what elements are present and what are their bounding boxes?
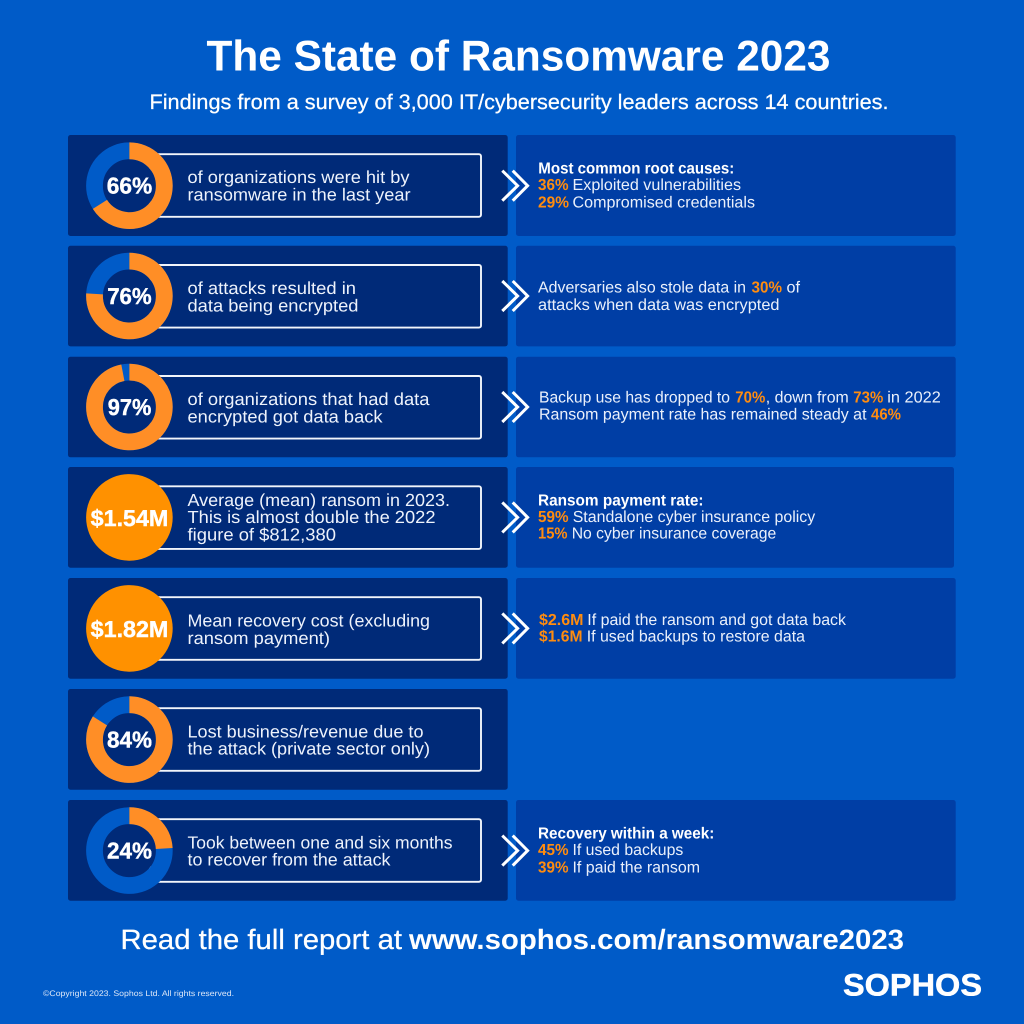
stat circle: $1.82M — [86, 585, 173, 672]
call to action: www.sophos.com/ransomware2023 — [408, 924, 904, 955]
donut: 97% — [94, 372, 164, 442]
backup use text: 70% — [735, 390, 765, 407]
copyright: ©Copyright 2023. Sophos Ltd. All rights reserved. — [43, 989, 234, 998]
text box — [150, 708, 481, 771]
call to action: Read the full report at — [120, 924, 402, 955]
title: The State of Ransomware 2023 — [206, 32, 830, 80]
text box — [150, 154, 481, 217]
chevron arrow — [502, 392, 528, 422]
backup use text: Backup use has dropped to — [539, 390, 730, 407]
right panel — [516, 357, 956, 457]
recovery cost comparison text: $1.6M — [539, 629, 582, 646]
row 3: data back — [68, 357, 956, 457]
stat circle: $1.82M: $1.82M — [91, 616, 168, 642]
text box: Mean recovery cost (excluding — [188, 611, 430, 631]
backup use text: Ransom payment rate has remained steady at — [539, 406, 867, 423]
backup use text: in 2022 — [887, 390, 941, 407]
donut: 66% — [94, 151, 164, 221]
root causes text: 29% — [538, 194, 569, 211]
recovery within a week text: If paid the ransom — [572, 859, 700, 876]
stolen data text: Adversaries also stole data in — [538, 280, 746, 297]
text box: encrypted got data back — [188, 406, 383, 426]
text box: Average (mean) ransom in 2023. — [188, 490, 450, 510]
chevron arrow — [502, 281, 528, 311]
text box: ransom payment) — [188, 628, 330, 648]
row 7: time to recover — [68, 800, 956, 901]
recovery within a week text — [538, 825, 714, 876]
text box: ransomware in the last year — [188, 184, 411, 204]
text box: to recover from the attack — [188, 850, 391, 870]
backup use text: 46% — [871, 406, 901, 423]
recovery cost comparison text: $2.6M — [539, 612, 584, 629]
text box — [150, 486, 481, 549]
chevron arrow — [502, 836, 528, 866]
left panel — [68, 467, 508, 568]
donut: 97%: 97% — [108, 394, 151, 420]
payment rate text: 59% — [538, 509, 568, 526]
donut: 66%: 66% — [107, 172, 152, 198]
row 5: recovery cost — [68, 578, 956, 679]
root causes text — [538, 160, 755, 211]
text box — [150, 819, 481, 882]
subtitle: Findings from a survey of 3,000 IT/cybersecurity leaders across 14 countries. — [150, 91, 888, 114]
text box: the attack (private sector only) — [188, 739, 430, 759]
stolen data text: 30% — [752, 280, 782, 297]
donut: 24% — [94, 816, 164, 886]
donut: 76% — [94, 261, 164, 331]
stolen data text: of — [786, 280, 801, 297]
text box — [150, 597, 481, 660]
stolen data text: attacks when data was encrypted — [538, 297, 780, 314]
right panel — [516, 246, 956, 346]
chevron arrow — [502, 502, 528, 532]
row 6: lost business — [68, 689, 508, 790]
right panel — [516, 800, 956, 901]
right panel — [516, 135, 956, 236]
left panel — [68, 246, 508, 346]
text box: of attacks resulted in — [188, 278, 356, 298]
left panel — [68, 800, 508, 901]
call to action — [120, 924, 904, 955]
chevron arrow — [502, 613, 528, 643]
right panel — [516, 578, 956, 679]
left panel — [68, 357, 508, 457]
stat circle: $1.54M — [86, 474, 173, 561]
payment rate text: 15% — [538, 526, 568, 543]
donut: 84% — [94, 705, 164, 774]
row 4: average ransom — [68, 467, 954, 568]
left panel — [68, 135, 508, 236]
chevron arrow — [502, 171, 528, 201]
recovery cost comparison text: If used backups to restore data — [587, 629, 805, 646]
recovery within a week text: Recovery within a week: — [538, 825, 714, 842]
payment rate text: Standalone cyber insurance policy — [573, 509, 815, 526]
backup use text: 73% — [853, 390, 883, 407]
root causes text: Exploited vulnerabilities — [572, 177, 741, 194]
donut: 24%: 24% — [107, 838, 152, 864]
recovery within a week text: If used backups — [572, 842, 683, 859]
payment rate text — [538, 492, 815, 543]
row 1: hit by ransomware — [68, 135, 956, 236]
right panel — [516, 467, 954, 568]
text box: Took between one and six months — [188, 832, 453, 852]
text box: data being encrypted — [188, 295, 358, 315]
text box — [150, 376, 481, 439]
row 2: data encrypted — [68, 246, 956, 346]
donut: 76%: 76% — [107, 283, 152, 309]
root causes text: Compromised credentials — [572, 194, 755, 211]
recovery within a week text: 39% — [538, 859, 568, 876]
recovery cost comparison text — [539, 612, 847, 646]
backup use text — [539, 390, 941, 423]
text box: of organizations that had data — [188, 389, 430, 409]
text box: of organizations were hit by — [188, 167, 410, 187]
text box: figure of $812,380 — [188, 524, 336, 544]
logo: Sophos: SOPHOS — [843, 968, 982, 1002]
donut: 84%: 84% — [107, 727, 152, 753]
backup use text: , down from — [766, 390, 849, 407]
root causes text: Most common root causes: — [538, 160, 734, 177]
left panel — [68, 689, 508, 790]
payment rate text: Ransom payment rate: — [538, 492, 704, 509]
left panel — [68, 578, 508, 679]
root causes text: 36% — [538, 177, 568, 194]
text box: This is almost double the 2022 — [188, 507, 436, 527]
payment rate text: No cyber insurance coverage — [572, 526, 776, 543]
text box: Lost business/revenue due to — [188, 721, 424, 741]
recovery within a week text: 45% — [538, 842, 568, 859]
recovery cost comparison text: If paid the ransom and got data back — [587, 612, 847, 629]
stolen data text — [538, 280, 801, 314]
stat circle: $1.54M: $1.54M — [91, 505, 168, 531]
text box — [150, 265, 481, 328]
